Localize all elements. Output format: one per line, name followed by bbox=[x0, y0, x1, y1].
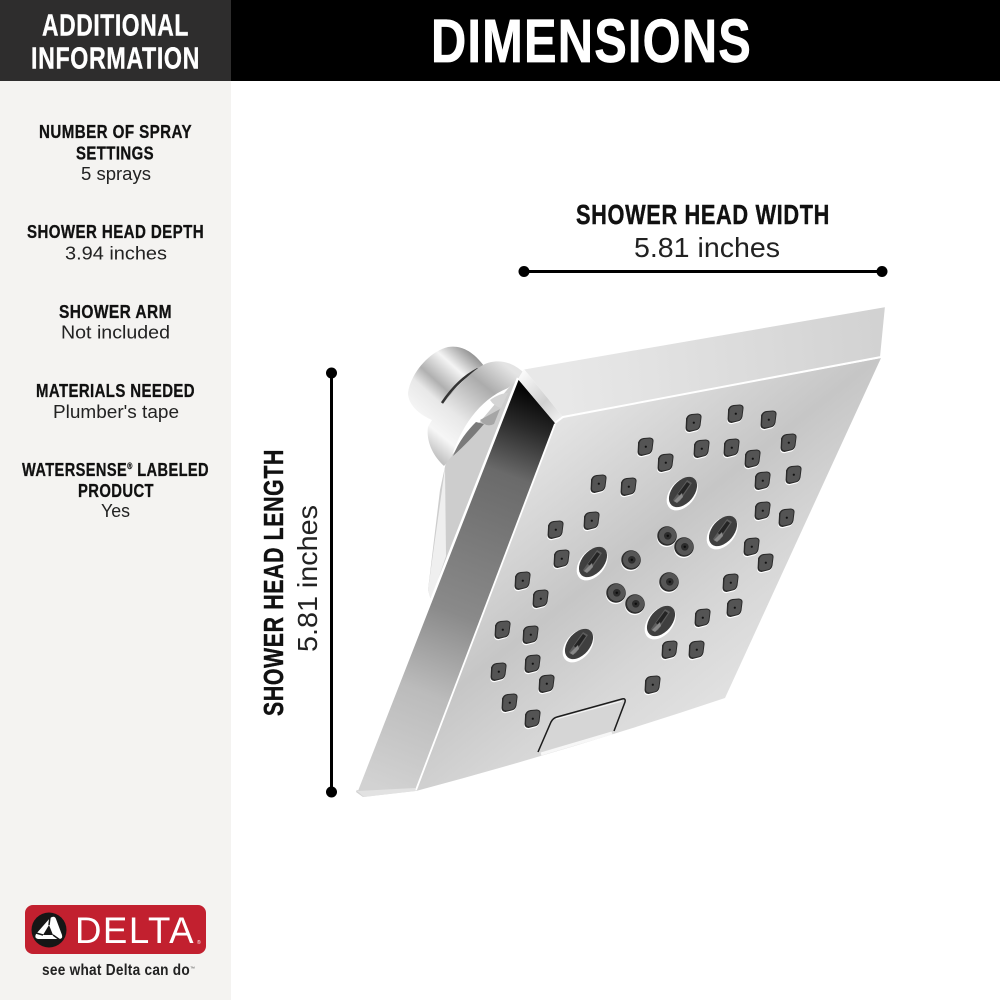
text block: shower head depth: 3.94 inches bbox=[65, 244, 167, 264]
header bar: dimensions bbox=[231, 0, 1000, 81]
text block: watersense: ® bbox=[127, 461, 133, 471]
logo: Delta: ™ bbox=[190, 966, 195, 972]
header bar: additional information: ADDITIONAL bbox=[42, 8, 189, 42]
bevel and plate highlights bbox=[357, 306, 886, 790]
top bevel bbox=[524, 306, 886, 417]
arrow: length dimension line bbox=[326, 368, 337, 798]
spray jets: large bbox=[556, 471, 744, 668]
text block: materials needed: MATERIALS NEEDED bbox=[36, 380, 195, 401]
text block: materials needed bbox=[36, 380, 195, 422]
face plate bbox=[416, 358, 881, 791]
header bar: additional information: INFORMATION bbox=[31, 42, 200, 76]
spray nozzles: square bbox=[490, 404, 802, 729]
text block: watersense: Yes bbox=[101, 501, 130, 521]
spray button bbox=[538, 699, 625, 754]
spray nozzles: round bbox=[606, 526, 694, 615]
bottom bevel lip bbox=[357, 788, 416, 797]
shower head illustration bbox=[356, 306, 886, 797]
text block: watersense bbox=[22, 459, 209, 521]
icon: arm connector cylinder bbox=[408, 347, 484, 420]
text block: spray settings: 5 sprays bbox=[81, 164, 151, 184]
panel: additional information sidebar bbox=[0, 0, 231, 1000]
text block: shower arm: SHOWER ARM bbox=[59, 301, 172, 322]
text block: shower head depth bbox=[27, 221, 204, 264]
text block: shower head depth: SHOWER HEAD DEPTH bbox=[27, 221, 204, 242]
logo: Delta bbox=[25, 905, 206, 979]
dimension label: width bbox=[576, 199, 830, 263]
side bevel bbox=[356, 378, 555, 797]
arrow: width dimension line bbox=[518, 266, 888, 277]
dimension label: length bbox=[258, 449, 323, 716]
corner facet bbox=[518, 369, 563, 423]
text block: spray settings: SETTINGS bbox=[76, 142, 154, 164]
text block: materials needed: Plumber's tape bbox=[53, 402, 179, 422]
text block: spray settings: NUMBER OF SPRAY bbox=[39, 121, 192, 142]
dimension label: width: 5.81 inches bbox=[634, 232, 780, 263]
logo: Delta: see what Delta can do bbox=[42, 962, 190, 979]
title: DIMENSIONS bbox=[431, 7, 752, 75]
text block: shower arm bbox=[59, 301, 172, 342]
text block: watersense: WATERSENSE bbox=[22, 459, 155, 480]
text block: watersense: PRODUCT bbox=[78, 480, 154, 501]
icon: collar ring bbox=[428, 361, 523, 466]
dimension label: width: SHOWER HEAD WIDTH bbox=[576, 199, 830, 230]
dimension label: length: 5.81 inches bbox=[292, 505, 323, 652]
icon: rear neck bbox=[428, 378, 517, 600]
dimension label: length: SHOWER HEAD LENGTH bbox=[258, 449, 289, 716]
text block: shower arm: Not included bbox=[61, 322, 170, 342]
text block: watersense: LABELED bbox=[133, 459, 209, 480]
text block: spray settings bbox=[39, 121, 192, 184]
logo: Delta: DELTA bbox=[75, 910, 195, 951]
logo: Delta: ® bbox=[197, 939, 201, 946]
header bar: additional information bbox=[0, 0, 231, 81]
